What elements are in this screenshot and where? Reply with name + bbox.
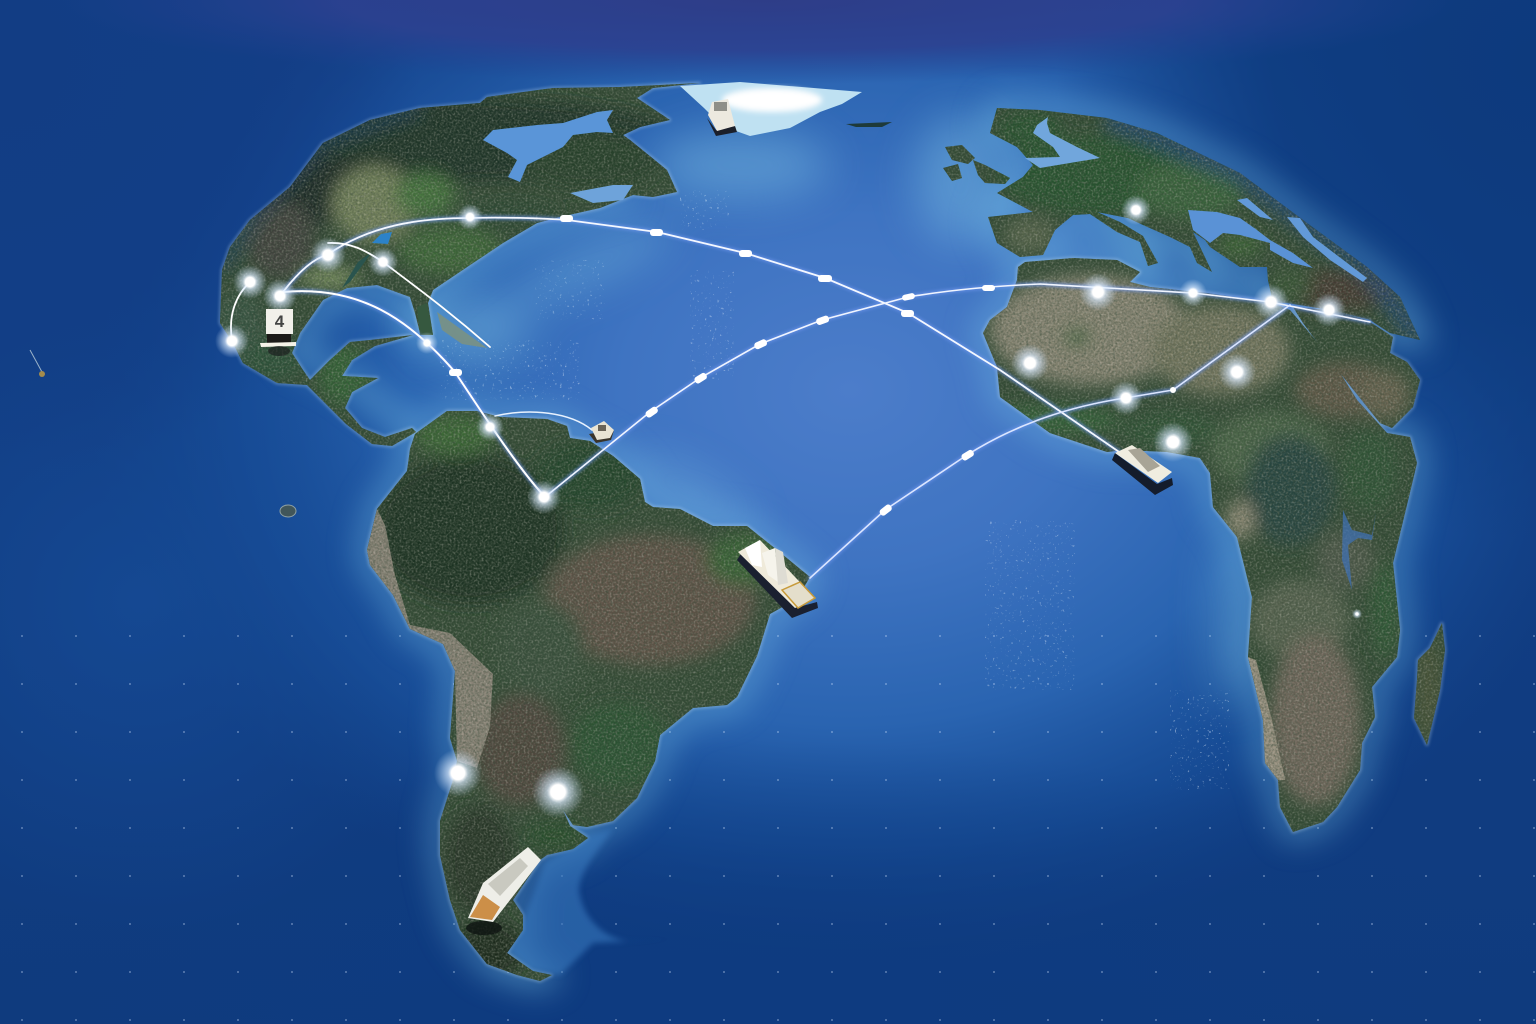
ship: caribbean — [589, 421, 614, 443]
route brazil to middle east — [810, 305, 1290, 578]
northern inland seas — [1237, 198, 1367, 282]
hudson bay — [483, 110, 613, 182]
south atlantic shelf — [510, 829, 673, 975]
route pacific coast — [231, 282, 250, 340]
small offshore vessels — [30, 350, 296, 517]
andes ridge — [367, 509, 493, 768]
route amazon to middle east — [545, 284, 1370, 497]
ship: patagonia — [466, 847, 541, 935]
african cape coast — [1248, 657, 1285, 780]
land masses base — [220, 83, 1445, 981]
black sea — [1188, 210, 1313, 268]
shipping routes — [231, 218, 1370, 578]
ship: west africa — [1112, 445, 1173, 495]
route caribbean arc — [495, 412, 592, 430]
inland waterway — [342, 252, 372, 288]
great lakes — [372, 232, 392, 244]
caribbean islands — [417, 303, 487, 348]
ship: gulf of mexico with sign: 4 — [275, 312, 285, 331]
ship: brazil coast — [737, 540, 818, 618]
iceland — [846, 122, 892, 127]
gulf of st lawrence — [570, 185, 633, 203]
route to west africa — [283, 218, 1125, 456]
route to amazon — [283, 291, 545, 497]
coastal shallow-water glow — [220, 83, 1445, 981]
terrain colour patches — [220, 83, 1445, 980]
route east coast — [328, 243, 490, 347]
glowing port nodes — [215, 195, 1362, 818]
rift lakes — [1342, 510, 1376, 590]
limb shading — [1107, 118, 1420, 340]
route glow — [283, 218, 1370, 578]
ship: gulf of mexico with sign — [260, 309, 296, 356]
baltic sea — [1025, 117, 1100, 168]
greenland ice sheet — [680, 82, 862, 136]
ship: greenland — [707, 99, 737, 136]
route waypoint markers — [449, 215, 1176, 517]
continents — [220, 82, 1445, 981]
